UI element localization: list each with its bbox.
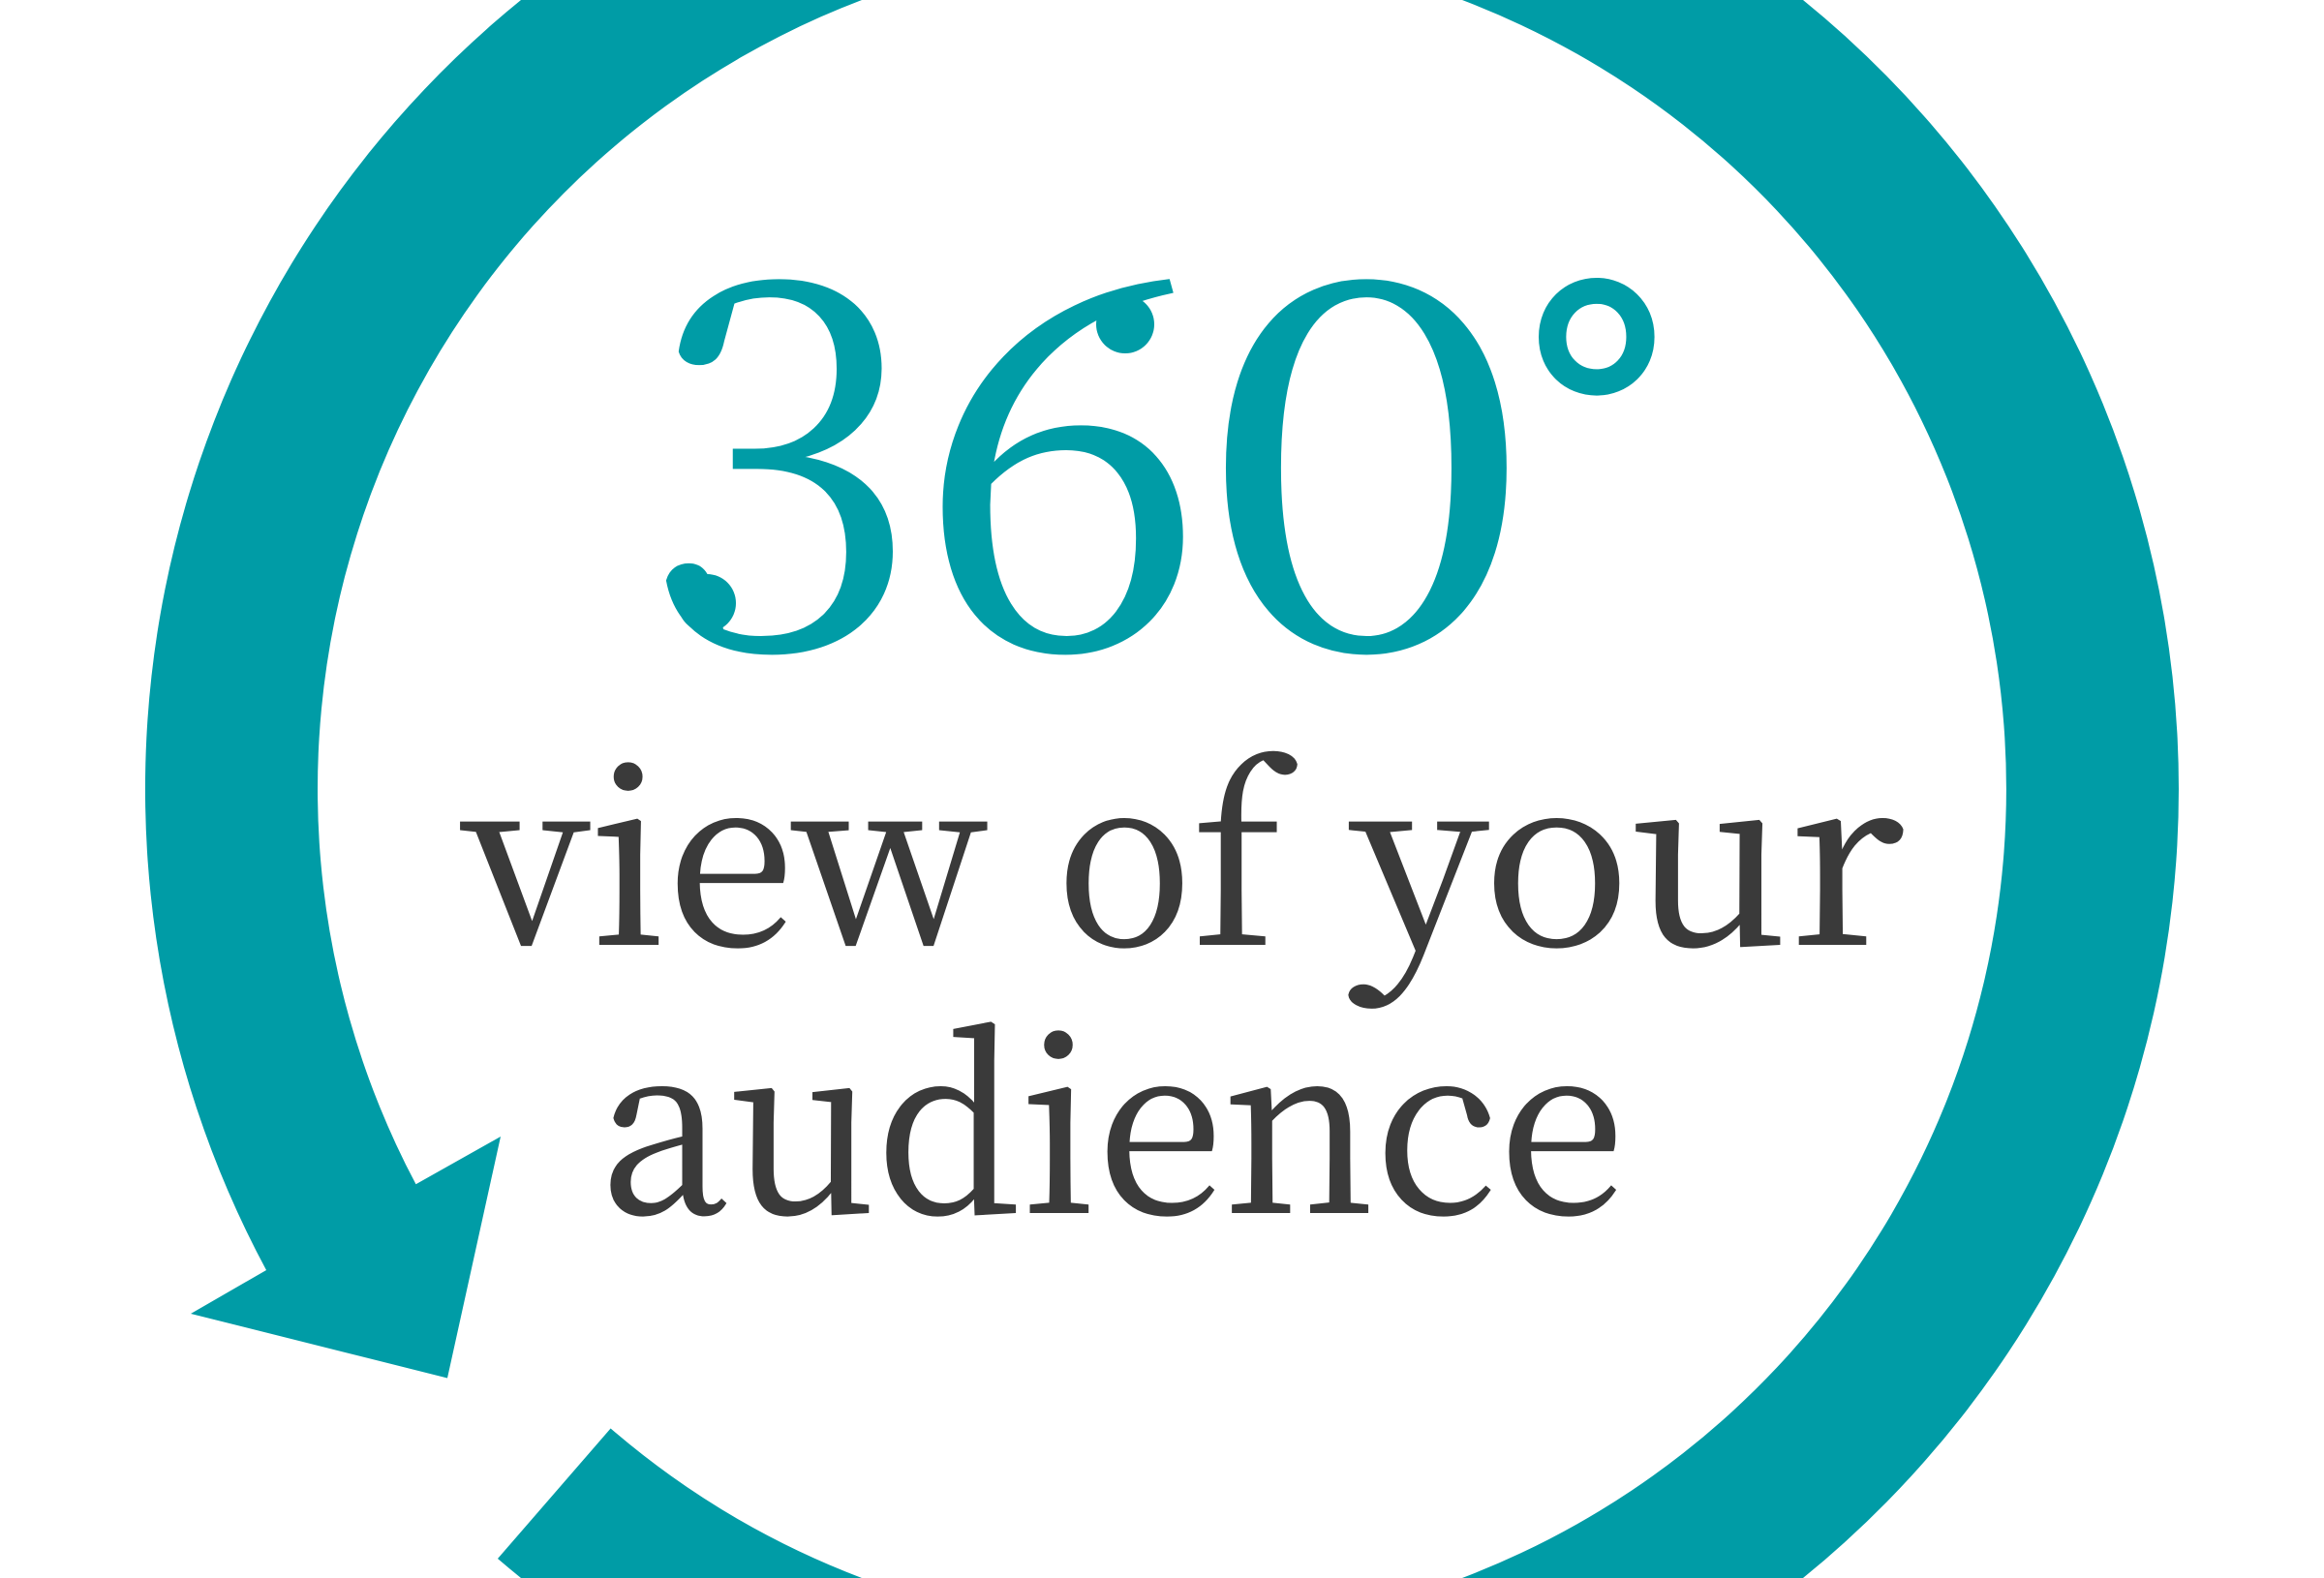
ring tail segment: [498, 1429, 862, 1578]
heading: 360 degrees: 0: [1197, 60, 1535, 792]
heading: 360 degrees: °: [1530, 129, 1663, 684]
arrow segment with arrowhead: [145, 0, 862, 1379]
subheading: view of your audience: audience: [599, 942, 1625, 1280]
heading: 360 degrees: [643, 60, 1663, 792]
subheading: view of your audience: [461, 674, 1904, 1280]
subheading: view of your audience: your: [1349, 674, 1904, 1012]
heading: 360 degrees: 3: [643, 60, 919, 792]
subheading: view of your audience: view: [461, 674, 988, 1012]
heading: 360 degrees: 6: [919, 60, 1208, 792]
right ring segment: [1462, 0, 2179, 1578]
subheading: view of your audience: of: [1056, 674, 1297, 1012]
